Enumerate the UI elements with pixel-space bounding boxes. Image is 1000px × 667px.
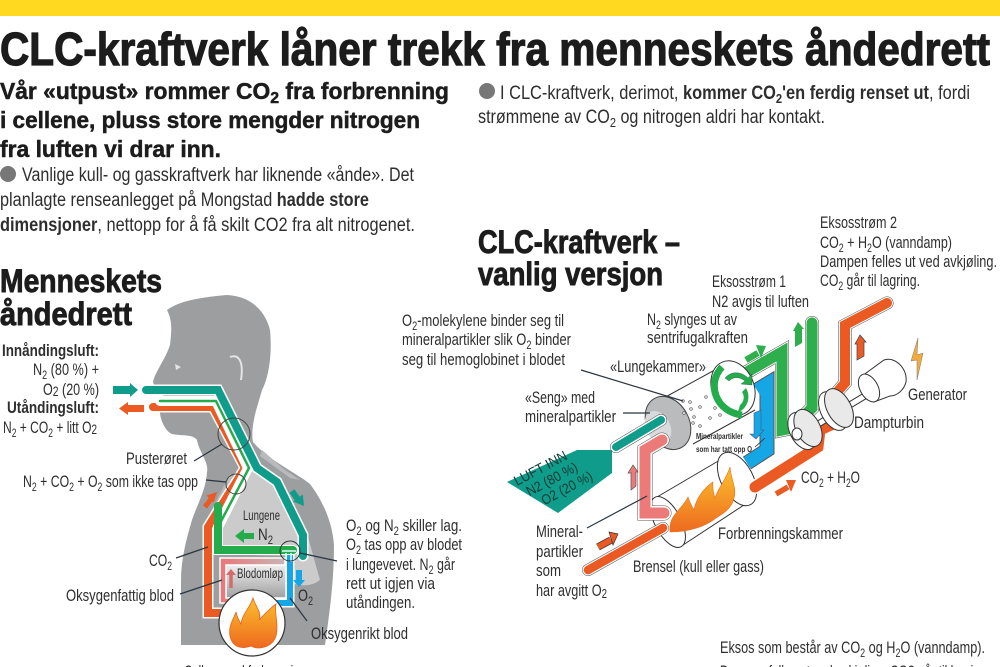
- callout: gas separation in lungs: tas opp av blodet: [361, 535, 462, 554]
- heading: CLC plant: CLC-kraftverk –: [478, 224, 680, 260]
- air inlet tag: [507, 441, 612, 515]
- label: exhaust stream 2: O (vanndamp): [872, 233, 952, 252]
- label: CO2 and H2O: CO: [801, 468, 826, 487]
- intro heading: fra forbrenning: [279, 78, 449, 104]
- label: CO2: 2: [167, 559, 172, 573]
- bottom exhaust note: 2: [895, 646, 901, 660]
- label: exhaled mix: 2: [98, 480, 103, 494]
- label: particles with oxygen: [696, 432, 765, 454]
- label: mineral bed: [525, 388, 650, 426]
- orange fuel pipe: [588, 528, 663, 570]
- label: mineral bed: «Seng» med: [525, 388, 595, 407]
- flow arrows: [598, 322, 866, 547]
- callout: gas separation in lungs: skiller lag.: [399, 516, 462, 535]
- callout: gas separation in lungs: 2: [356, 524, 362, 538]
- label: oxygen-poor blood: [66, 580, 222, 605]
- right body text: [478, 83, 970, 130]
- heading: CLC plant: [478, 224, 680, 292]
- yellow top banner: [0, 0, 1000, 16]
- left body text: [0, 165, 415, 236]
- right body text: strømmene av CO: [478, 107, 633, 128]
- human labels: inhaled and exhaled air: + litt O: [53, 418, 91, 437]
- human labels: inhaled and exhaled air: O: [43, 380, 56, 399]
- label: exhaust stream 2: Eksosstrøm 2: [820, 213, 897, 232]
- label: O2 by blue pipe: O: [298, 586, 311, 605]
- label: O2 molecules bind: mineralpartikler slik O: [402, 330, 565, 349]
- label: exhaled mix: N: [23, 472, 35, 491]
- fire circle: [219, 590, 285, 656]
- label: exhaust stream 2: + H: [844, 233, 867, 252]
- pipe circle lower: [226, 474, 246, 494]
- label: exhaust stream 2: går til lagring.: [843, 271, 920, 290]
- nitrogen green pipe: [160, 401, 293, 550]
- right body text: 2: [776, 91, 782, 106]
- label: exhaled mix: [23, 472, 226, 494]
- label: spent mineral particles: Mineral-: [536, 522, 583, 541]
- label: O2 molecules bind: 2: [412, 319, 417, 333]
- label: exhaled mix: + CO: [37, 472, 69, 491]
- blue oxygen pipe: [747, 384, 767, 463]
- label: steam turbine: Dampturbin: [854, 413, 924, 432]
- label: exhaust stream 2: CO: [820, 233, 846, 252]
- intro heading: fra luften vi drar inn.: [0, 136, 221, 162]
- intro heading: [0, 78, 449, 162]
- label: lung chamber: «Lungekammer»: [610, 357, 706, 376]
- human labels: inhaled and exhaled air: 2: [91, 421, 97, 437]
- pink mineral pipe: [645, 440, 664, 513]
- human labels: inhaled and exhaled air: (80 %) +: [47, 360, 99, 379]
- bottom exhaust note: [720, 638, 990, 667]
- label: exhaled mix: 2: [69, 480, 74, 494]
- lungs: [214, 467, 320, 585]
- label: O2 molecules bind: 2: [526, 338, 532, 352]
- green ring: [703, 354, 763, 422]
- callout: gas separation in lungs: O: [346, 516, 359, 535]
- flow arrows: [113, 383, 305, 587]
- intro heading: i cellene, pluss store mengder nitrogen: [0, 107, 420, 133]
- callout: gas separation in lungs: går: [433, 555, 455, 574]
- human labels: inhaled and exhaled air: 2: [53, 383, 59, 399]
- steam turbine and generator: [782, 359, 906, 454]
- label: O2 molecules bind: binder: [531, 330, 571, 349]
- heading: human breathing: Menneskets: [0, 263, 162, 299]
- label: O2 molecules bind: O: [402, 311, 415, 330]
- human labels: inhaled and exhaled air: Innåndingsluft:: [2, 341, 99, 360]
- heading: human breathing: åndedrett: [0, 296, 132, 332]
- intro heading: 2: [270, 90, 279, 107]
- label: particles with oxygen: Mineralpartikler: [696, 432, 743, 441]
- label: spent mineral particles: [536, 496, 647, 601]
- label: spent mineral particles: partikler: [536, 542, 583, 561]
- label: generator: Generator: [908, 385, 967, 404]
- right body text: , fordi: [929, 83, 977, 104]
- label: O2 molecules bind: -molekylene binder seg til: [417, 311, 564, 330]
- air inlet tag: O2 (20 %): [538, 468, 595, 508]
- heading: human breathing: [0, 263, 162, 332]
- callout: gas separation in lungs: 2: [394, 524, 399, 538]
- label: oxygen-rich blood: [290, 598, 408, 643]
- combustion chamber cylinder: [643, 446, 765, 553]
- label: CO2: [149, 547, 208, 573]
- orange exhaust pipes: [755, 303, 887, 487]
- label: exhaust stream 2: [820, 213, 997, 293]
- label: N2 centrifuge: 2: [656, 318, 661, 332]
- heading: CLC plant: vanlig versjon: [478, 256, 663, 292]
- right body text: 'en ferdig renset ut: [782, 83, 930, 104]
- oxygen-rich blue pipe: [270, 556, 290, 603]
- human labels: inhaled and exhaled air: [2, 341, 99, 440]
- label: exhaust stream 1: Eksosstrøm 1: [712, 272, 786, 291]
- callout: gas separation in lungs: 2: [429, 563, 434, 577]
- label: exhaust stream 1: N2 avgis til luften: [712, 292, 809, 311]
- green exhaust pipe: [747, 323, 812, 430]
- inhaled air teal pipe: [146, 390, 303, 556]
- label: exhaled mix: 2: [32, 480, 37, 494]
- right body text: I CLC-kraftverk, derimot, kommer CO: [500, 83, 791, 104]
- label: spent mineral particles: har avgitt O: [536, 581, 624, 600]
- label: N2 centrifuge: [647, 310, 748, 347]
- label: N2 centrifuge: N: [647, 310, 659, 329]
- human labels: inhaled and exhaled air: N: [33, 360, 45, 379]
- label: windpipe: [126, 444, 222, 468]
- eye: [175, 364, 181, 370]
- air inlet tag: LUFT INN: [511, 447, 570, 489]
- windpipe circle: [218, 418, 250, 450]
- label: exhaust stream 2: CO: [820, 271, 846, 290]
- callout: gas separation in lungs: rett ut igjen via: [346, 574, 435, 593]
- label: fuel: Brensel (kull eller gass): [633, 557, 764, 576]
- label: O2 molecules bind: seg til hemoglobinet i blodet: [402, 350, 565, 369]
- label: CO2 and H2O: 2: [819, 476, 824, 490]
- label: windpipe: Pusterøret: [126, 449, 187, 468]
- label: exhaust stream 2: 2: [867, 241, 872, 255]
- bottom exhaust note: og H: [865, 638, 895, 657]
- label: CO2 and H2O: + H: [824, 468, 846, 487]
- callout: gas separation in lungs: 2: [356, 543, 361, 557]
- air inlet tag: N2 (80 %): [523, 459, 580, 499]
- label: exhaled mix: + O: [74, 472, 98, 491]
- label: exhaust stream 2: 2: [838, 279, 843, 293]
- lung exchange circle: [280, 541, 300, 562]
- blood circuit: [220, 558, 286, 603]
- human labels: inhaled and exhaled air: 2: [48, 426, 53, 440]
- human labels: inhaled and exhaled air: 2: [42, 368, 47, 382]
- label: exhaust stream 1: [712, 272, 809, 311]
- label: N2 in lungs: 2: [268, 533, 273, 547]
- label: O2 by blue pipe: 2: [308, 594, 313, 608]
- callout: gas separation in lungs: [300, 516, 462, 612]
- human labels: inhaled and exhaled air: + CO: [16, 418, 48, 437]
- left body text: dimensjoner, nettopp for å få skilt CO2 fra alt nitrogenet.: [0, 215, 415, 236]
- label: CO2: CO: [149, 551, 174, 570]
- human labels: inhaled and exhaled air: (20 %): [59, 380, 99, 399]
- label: mineral bed: mineralpartikler: [525, 407, 616, 426]
- label: blood circuit: Blodomløp: [237, 566, 283, 581]
- human labels: inhaled and exhaled air: Utåndingsluft:: [7, 398, 99, 417]
- label: O2 molecules bind: [402, 311, 683, 401]
- label: CO2 and H2O: O: [851, 468, 860, 487]
- lung chamber cylinder: [636, 366, 755, 458]
- label: CO2 and H2O: 2: [846, 476, 851, 490]
- CO2 orange pipe: [153, 407, 245, 613]
- callout: gas separation in lungs: i lungevevet. N: [346, 555, 458, 574]
- bottom exhaust note: 2: [860, 646, 865, 660]
- shoulder highlight: [204, 450, 300, 540]
- right body text: 2: [610, 115, 616, 130]
- label: N2 in lungs: N: [258, 525, 270, 544]
- CLC plant diagram: [507, 303, 923, 570]
- label: lungs: Lungene: [243, 508, 280, 523]
- label: spent mineral particles: 2: [602, 586, 607, 601]
- human labels: inhaled and exhaled air: N: [3, 418, 15, 437]
- label: exhaled mix: som ikke tas opp: [102, 472, 198, 491]
- intro heading: Vår «utpust» rommer CO: [0, 78, 272, 104]
- bottom exhaust note: Eksos som består av CO: [720, 638, 908, 657]
- label: particles with oxygen: som har tatt opp O: [696, 445, 752, 454]
- left body text: planlagte renseanlegget på Mongstad hadde store: [0, 190, 369, 211]
- teal air pipe: [616, 420, 661, 447]
- callout: gas separation in lungs: O: [346, 535, 359, 554]
- label: oxygen-rich blood: Oksygenrikt blod: [311, 624, 408, 643]
- right body text: og nitrogen aldri har kontakt.: [616, 107, 825, 128]
- silhouette: [153, 295, 334, 645]
- label: combustion chamber: Forbrenningskammer: [718, 524, 843, 543]
- human breathing diagram: [113, 295, 334, 656]
- icon: lightning bolt: [911, 338, 923, 380]
- callout: gas separation in lungs: utåndingen.: [346, 593, 415, 612]
- human labels: inhaled and exhaled air: 2: [12, 426, 17, 440]
- ear: [230, 356, 242, 380]
- label: N2 centrifuge: sentrifugalkraften: [647, 328, 748, 347]
- left body text: Vanlige kull- og gasskraftverk har liknende «ånde». Det: [22, 165, 415, 186]
- label: N2 centrifuge: slynges ut av: [661, 310, 737, 329]
- label: oxygen-poor blood: Oksygenfattig blod: [66, 586, 174, 605]
- callout: gas separation in lungs: og N: [362, 516, 394, 535]
- label: spent mineral particles: som: [536, 561, 561, 580]
- label: exhaust stream 2: 2: [839, 241, 844, 255]
